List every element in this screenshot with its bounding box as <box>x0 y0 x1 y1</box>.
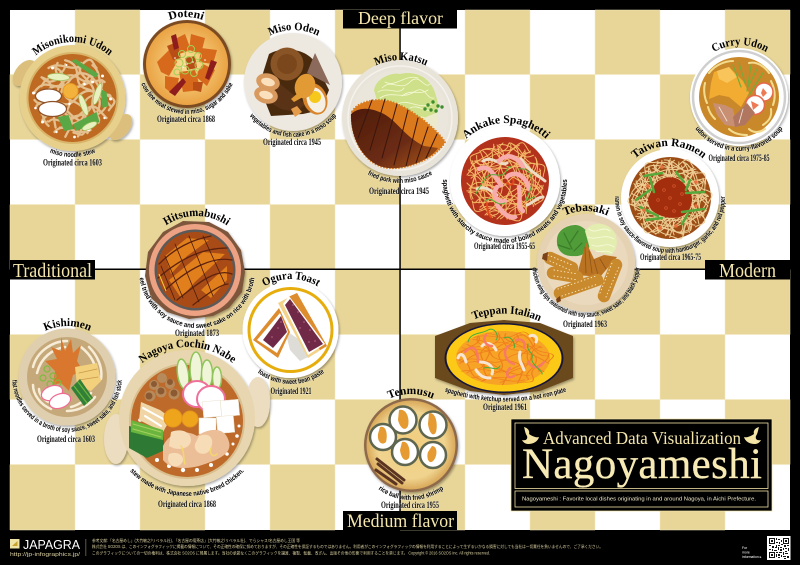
logo wordmark: JAPAGRA <box>23 538 81 552</box>
heading: Misonikomi Udon: Misonikomi Udon <box>31 34 112 56</box>
description: fried pork with miso sauce <box>368 170 432 184</box>
illustration: bean paste toast <box>242 282 338 378</box>
icon: shachihoko right <box>744 427 761 444</box>
description: spaghetti with ketchup served on a hot iron plate <box>444 388 566 404</box>
heading: Kishimen: Kishimen <box>42 318 91 331</box>
footer: credits text: 株式会社 SO2OS は、このインフォグラフィックに掲載の情報について、その正確性の確保に努めておりますが、その正確性を保証するものではありません。利用者がこのインフォグラフィックの情報を利用することによって生ずるいかなる損害に対しても当社は一切責任を負いませんので、ご了承ください。 <box>92 543 603 550</box>
dish: Tebasaki <box>532 204 641 329</box>
origin date: Originated circa 1955-65 <box>474 241 535 251</box>
origin date: Originated circa 1955 <box>381 500 439 510</box>
origin date: Originated 1873 <box>175 328 219 338</box>
axis label: Medium flavor: Medium flavor <box>347 511 455 532</box>
dish: Kishimen <box>12 318 122 444</box>
dish: Nagoya Cochin Nabe <box>104 339 272 510</box>
illustration: pork cutlet plate <box>342 60 458 176</box>
origin date: Originated circa 1945 <box>263 137 321 147</box>
subtitle: Advanced Data Visualization <box>543 428 741 448</box>
main title: Nagoyameshi <box>522 441 762 488</box>
dish: Taiwan Ramen <box>614 138 726 262</box>
heading: Doteni: Doteni <box>168 10 204 20</box>
definition: Nagoyameshi : Favorite local dishes originating in and around Nagoya, in Aichi Prefecture. <box>522 497 756 503</box>
heading: Tebasaki: Tebasaki <box>562 204 610 216</box>
description: flat noodles served in a broth of soy sauce, sweet sake, and fish stick <box>12 380 122 434</box>
dish: Ankake Spaghetti <box>442 115 567 251</box>
footer: credits text: 参考文献:「名古屋めし」(大竹敏之/リベラル社)、「名古屋の喫茶店」(大竹敏之/リベラル社)、でらシャス!名古屋めし王国 等 <box>92 537 300 544</box>
origin date: Originated circa 1603 <box>37 434 95 444</box>
illustration: flat noodle bowl <box>18 328 116 426</box>
QR code <box>767 536 790 560</box>
description: miso noodle stew <box>50 148 95 158</box>
dish: Hitsumabushi <box>139 208 255 338</box>
origin date: Originated 1921 <box>270 386 312 396</box>
description: eel tried with soy sauce and sweet sake on rice with broth <box>139 278 255 328</box>
dish: Misonikomi Udon <box>12 34 134 168</box>
footer: more information note: For <box>742 546 748 550</box>
origin date: Originated circa 1945 <box>369 186 429 196</box>
illustration: chicken wing plate <box>537 214 635 312</box>
dish: Miso Oden <box>244 22 344 147</box>
logo url: http://jp-infographics.jp/ <box>10 552 81 558</box>
axis label: Deep flavor: Deep flavor <box>358 8 443 28</box>
illustration: hot pot <box>104 350 270 486</box>
title panel <box>511 419 772 511</box>
heading: Ogura Toast: Ogura Toast <box>262 272 320 286</box>
dish: Teppan Italian <box>434 306 576 412</box>
illustration: stewed beef plate <box>143 20 231 108</box>
illustration: shrimp rice balls plate <box>364 398 458 492</box>
axis label: Traditional: Traditional <box>13 260 92 282</box>
heading: Nagoya Cochin Nabe: Nagoya Cochin Nabe <box>138 339 236 364</box>
heading: Curry Udon: Curry Udon <box>712 38 768 52</box>
heading: Ankake Spaghetti: Ankake Spaghetti <box>464 115 550 139</box>
origin date: Originated 1961 <box>483 402 527 412</box>
origin date: Originated circa 1603 <box>43 158 102 168</box>
dish: Tenmusu <box>364 388 460 510</box>
description: vegetables and fish cake in a miso soup <box>250 113 336 138</box>
illustration: ramen bowl <box>618 146 724 252</box>
origin date: Originated circa 1965-75 <box>640 252 701 262</box>
illustration: iron plate spaghetti <box>435 320 573 395</box>
description: udon served in a curry-flavored soup <box>695 126 782 152</box>
illustration: curry udon bowl <box>690 48 788 146</box>
footer: credits text <box>92 537 603 556</box>
description: ramen in soy sauce-flavored soup with hamburger, garlic, and red pepper <box>614 196 726 254</box>
icon: shachihoko left <box>522 427 539 444</box>
footer: credits text: このグラフィックについての一切の権利は、株式会社 SO2OS に帰属します。当社の承諾なくこのグラフィックを譲渡、複製、転載、改ざん、出版その他の形態で利用することを禁じます。 Copyright © 2016 SO2OS Inc. All rights reserved. <box>92 550 490 556</box>
description: stew made with Japanese native breed chicken. <box>130 469 244 497</box>
dish: Ogura Toast <box>242 272 341 396</box>
illustration: eel in ceramic bowl <box>145 221 245 319</box>
footer: more information note: information ▸ <box>742 555 762 559</box>
dish: Miso Katsu <box>342 52 460 196</box>
icon: logo mark <box>10 539 20 548</box>
origin date: Originated circa 1868 <box>158 499 216 509</box>
illustration: miso noodle pot <box>8 45 137 151</box>
heading: Teppan Italian: Teppan Italian <box>471 306 541 322</box>
description: rice ball with fried shrimp <box>378 486 444 500</box>
description: spaghetti with starchy sauce made of boiled meats and vegetables <box>442 180 567 244</box>
illustration: spaghetti plate <box>450 126 560 236</box>
dish: Doteni <box>141 10 234 124</box>
heading: Tenmusu: Tenmusu <box>386 388 434 399</box>
heading: Hitsumabushi: Hitsumabushi <box>162 208 231 226</box>
heading: Taiwan Ramen: Taiwan Ramen <box>630 138 706 158</box>
origin date: Originated circa 1868 <box>157 114 215 124</box>
description: chicken wing tips seasoned with soy sauce, sweet sake, and black pepper <box>532 267 641 318</box>
footer: more information note: more <box>742 550 750 554</box>
description: cow line meat stewed in miso, sugar and sake <box>141 82 232 114</box>
footer: publisher logo <box>10 538 81 558</box>
origin date: Originated 1963 <box>563 319 607 329</box>
dish: Curry Udon <box>690 38 790 163</box>
heading: Miso Katsu: Miso Katsu <box>373 52 428 66</box>
heading: Miso Oden: Miso Oden <box>267 22 320 36</box>
description: toast with sweet bean paste <box>258 369 324 384</box>
axis label: Modern: Modern <box>719 260 776 282</box>
illustration: oden plate <box>244 33 342 131</box>
